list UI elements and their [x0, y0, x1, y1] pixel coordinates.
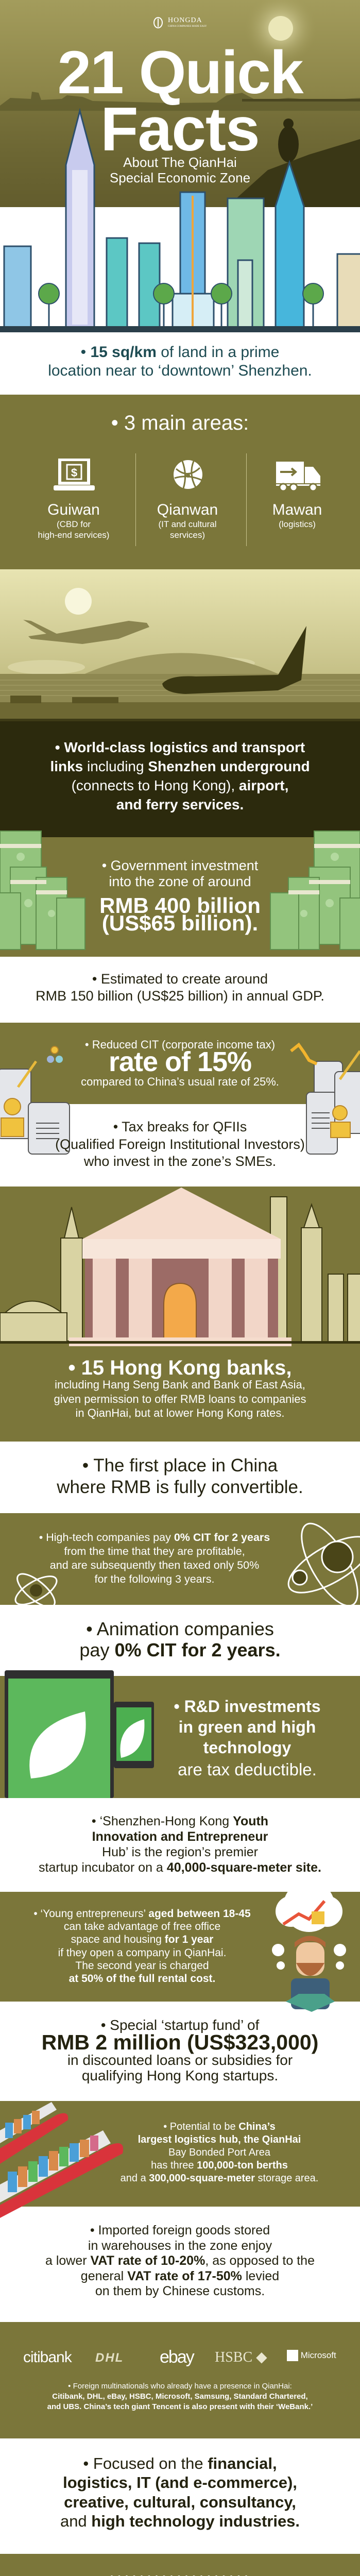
- text: high-tech CIT: [39, 1531, 270, 1585]
- panel: government investment: [0, 837, 360, 957]
- icon: laptop dollar: $: [71, 466, 77, 479]
- fact: VAT rate: general VAT rate of 17-50% levied: [81, 2269, 279, 2283]
- column: Qianwan: Qianwan: [157, 501, 218, 518]
- text: world-class logistics: [50, 739, 310, 812]
- title: 21 Quick Facts: Facts: [100, 95, 260, 164]
- column: Qianwan: (IT and cultural: [158, 519, 217, 529]
- icon grid: people: [111, 2575, 247, 2576]
- airport illustration: [0, 569, 360, 721]
- text: world-class logistics: and ferry services.: [116, 796, 244, 812]
- subtitle: Special Economic Zone: [110, 170, 250, 185]
- fact: 15 sq/km: • 15 sq/km of land in a prime: [81, 344, 279, 361]
- subtitle: [110, 155, 250, 185]
- text: world-class logistics: links including Shenzhen underground: [50, 758, 310, 774]
- panel: reduced CIT: rate of 15%: [109, 1046, 251, 1077]
- text: logistics hub: largest logistics hub, the QianHai: [138, 2134, 301, 2145]
- fact: VAT rate: a lower VAT rate of 10-20%, as opposed to the: [45, 2253, 315, 2268]
- logos row: Microsoft: [301, 2350, 336, 2360]
- panel: reduced CIT: [0, 1023, 360, 1104]
- logo: HONGDA: [153, 16, 207, 28]
- column: Mawan: [272, 501, 322, 529]
- text: R&D: in green and high: [179, 1718, 316, 1736]
- logo: HONGDA: CHINA COMPANIES MADE EASY: [168, 25, 207, 28]
- panel: young entrepreneurs: [0, 1892, 360, 2002]
- illustration: money stacks: [0, 831, 360, 950]
- text: investment: [102, 858, 259, 889]
- illustration: atoms: [14, 1523, 360, 1605]
- logo: HONGDA: HONGDA: [168, 16, 202, 24]
- heading: 3 main areas: • 3 main areas:: [111, 412, 249, 434]
- panel: high-tech companies: [0, 1513, 360, 1605]
- fact: youth innovation hub: Hub’ is the region’s premier: [102, 1845, 258, 1859]
- text: logistics hub: and a 300,000-square-meter storage area.: [121, 2173, 318, 2184]
- text: multinationals: • Foreign multinationals who already have a presence in QianHai:: [68, 2382, 292, 2391]
- text: world-class logistics: • World-class logistics and transport: [55, 739, 305, 755]
- fact: annual GDP: [36, 971, 324, 1004]
- text: reduced CIT: • Reduced CIT (corporate income tax): [85, 1038, 275, 1051]
- panel: R&D investments: are tax deductible.: [178, 1760, 317, 1779]
- fact: VAT rate: in warehouses in the zone enjoy: [88, 2238, 272, 2252]
- text: world-class logistics: (connects to Hong Kong), airport,: [72, 777, 288, 793]
- fact: VAT rate: on them by Chinese customs.: [95, 2284, 265, 2298]
- panel: Hong Kong banks: including Hang Seng Bank and Bank of East Asia,: [55, 1378, 305, 1391]
- text: young entrepreneurs: • ‘Young entrepreneurs’ aged between 18-45: [33, 1908, 251, 1920]
- panel: foreign multinationals: [0, 2322, 360, 2438]
- text: high-tech CIT: • High-tech companies pay 0% CIT for 2 years: [39, 1531, 270, 1544]
- fact: 15 sq/km: [48, 344, 312, 379]
- text: high-tech CIT: and are subsequently then taxed only 50%: [50, 1559, 259, 1571]
- fact: focused industries: logistics, IT (and e-commerce),: [63, 2473, 297, 2492]
- panel: Hong Kong banks: given permission to offer RMB loans to companies: [54, 1392, 306, 1405]
- fact: RMB fully convertible: where RMB is fully convertible.: [57, 1477, 303, 1497]
- fact: 15 sq/km: location near to ‘downtown’ Shenzhen.: [48, 362, 312, 379]
- column: Mawan: Mawan: [272, 501, 322, 518]
- fact: focused industries: • Focused on the financial,: [83, 2454, 277, 2472]
- logos row: ebay: [160, 2347, 194, 2367]
- fact: VAT rate: • Imported foreign goods stored: [90, 2223, 270, 2238]
- fact: annual GDP: RMB 150 billion (US$25 billion) in annual GDP.: [36, 988, 324, 1004]
- title: 21 Quick Facts: 21 Quick: [58, 39, 302, 107]
- text: young entrepreneurs: can take advantage of free office: [64, 1921, 220, 1933]
- fact: youth innovation hub: startup incubator on a 40,000-square-meter site.: [39, 1860, 321, 1875]
- panel: government investment: RMB 400 billion: [99, 893, 261, 918]
- panel: reduced CIT: compared to China’s usual rate of 25%.: [81, 1075, 279, 1088]
- text: investment: • Government investment: [102, 858, 258, 873]
- fact: focused industries: and high technology industries.: [60, 2512, 300, 2530]
- illustration: tablets with leaf: [5, 1670, 154, 1798]
- fact: startup fund: • Special ‘startup fund’ of: [101, 2017, 259, 2033]
- text: high-tech CIT: for the following 3 years.: [94, 1573, 215, 1585]
- panel: transport links: [0, 721, 360, 837]
- logos row: HSBC ◆: [215, 2349, 267, 2365]
- fact: tax breaks for QFIIs: • Tax breaks for QFIIs: [113, 1119, 247, 1134]
- illustration: tax papers and coins: [0, 1043, 360, 1155]
- text: young entrepreneurs: space and housing for 1 year: [71, 1934, 213, 1945]
- fact: youth innovation hub: Innovation and Entrepreneur: [92, 1829, 268, 1844]
- text: logistics hub: • Potential to be China’s: [163, 2121, 276, 2132]
- fact: VAT rate: [45, 2223, 315, 2298]
- illustration: container ships: [0, 2102, 124, 2218]
- skyline buildings illustration: [0, 108, 360, 332]
- fact: youth innovation hub: • ‘Shenzhen-Hong Kong Youth: [92, 1814, 268, 1828]
- panel: jobs: [0, 2554, 360, 2576]
- text: multinationals: [47, 2382, 313, 2411]
- fact: focused industries: creative, cultural, consultancy,: [64, 2493, 296, 2511]
- illustration: bank building and skyline: [0, 1188, 360, 1346]
- panel: logistics hub: [0, 2101, 360, 2207]
- text: R&D: [174, 1697, 321, 1757]
- subtitle: About The QianHai: [123, 155, 237, 170]
- fact: RMB fully convertible: • The first place in China: [82, 1455, 278, 1476]
- logos row: DHL: [95, 2351, 124, 2365]
- column: Guiwan: Guiwan: [47, 501, 100, 518]
- text: young entrepreneurs: [33, 1908, 251, 1985]
- text: 15 Hong Kong banks: • 15 Hong Kong banks,: [68, 1357, 292, 1379]
- text: high-tech CIT: from the time that they are profitable,: [64, 1545, 245, 1557]
- text: multinationals: Citibank, DHL, eBay, HSBC, Microsoft, Samsung, Standard Chartered,: [52, 2392, 308, 2401]
- text: qualifying Hong Kong startups.: [82, 2067, 278, 2083]
- fact: animation companies: • Animation companies: [86, 1618, 274, 1639]
- fact: animation companies: pay 0% CIT for 2 years.: [79, 1639, 281, 1660]
- column: Qianwan: services): [170, 530, 205, 540]
- fact: animation companies: [79, 1618, 281, 1660]
- fact: tax breaks for QFIIs: (Qualified Foreign Institutional Investors): [55, 1137, 305, 1152]
- column: Qianwan: [157, 501, 218, 540]
- fact: annual GDP: • Estimated to create around: [92, 971, 268, 987]
- text: logistics hub: has three 100,000-ton berths: [151, 2160, 288, 2171]
- text: logistics hub: Bay Bonded Port Area: [168, 2147, 270, 2158]
- text: RMB 2 million (US$323,000): [42, 2030, 318, 2054]
- icon: globe network: [174, 460, 202, 489]
- title: 21 Quick Facts: [58, 39, 304, 164]
- panel: Hong Kong banks: in QianHai, but at lower Hong Kong rates.: [75, 1406, 284, 1419]
- fact: focused industries: [60, 2454, 300, 2530]
- column: Guiwan: (CBD for: [57, 519, 91, 529]
- illustration: meditating entrepreneur: [272, 1892, 346, 2012]
- logos row: citibank: [23, 2349, 72, 2366]
- text: R&D: technology: [203, 1738, 291, 1757]
- icon: delivery truck: [276, 462, 320, 490]
- panel: government investment: (US$65 billion).: [102, 911, 258, 935]
- icon: laptop dollar: [54, 459, 95, 490]
- column: Guiwan: high-end services): [38, 530, 109, 540]
- panel: R&D investments: [0, 1676, 360, 1798]
- text: multinationals: and UBS. China’s tech giant Tencent is also present with their ‘WeBank.’: [47, 2402, 313, 2411]
- text: R&D: • R&D investments: [174, 1697, 321, 1716]
- fact: RMB fully convertible: [57, 1455, 303, 1497]
- text: investment: into the zone of around: [109, 874, 251, 889]
- text: in discounted loans or subsidies for: [67, 2052, 293, 2068]
- column: Mawan: (logistics): [279, 519, 316, 529]
- text: young entrepreneurs: at 50% of the full rental cost.: [69, 1973, 215, 1985]
- text: young entrepreneurs: The second year is charged: [75, 1960, 209, 1972]
- panel: 3 main areas: [0, 395, 360, 569]
- fact: youth innovation hub: [39, 1814, 321, 1875]
- fact: tax breaks for QFIIs: [55, 1119, 305, 1169]
- column: Guiwan: [38, 501, 109, 540]
- panel: Hong Kong banks: [0, 1187, 360, 1442]
- hero photo background: [0, 0, 360, 207]
- logos row: [23, 2347, 336, 2367]
- text: logistics hub: [121, 2121, 318, 2184]
- fact: tax breaks for QFIIs: who invest in the zone’s SMEs.: [84, 1154, 276, 1169]
- text: young entrepreneurs: if they open a company in QianHai.: [58, 1947, 226, 1959]
